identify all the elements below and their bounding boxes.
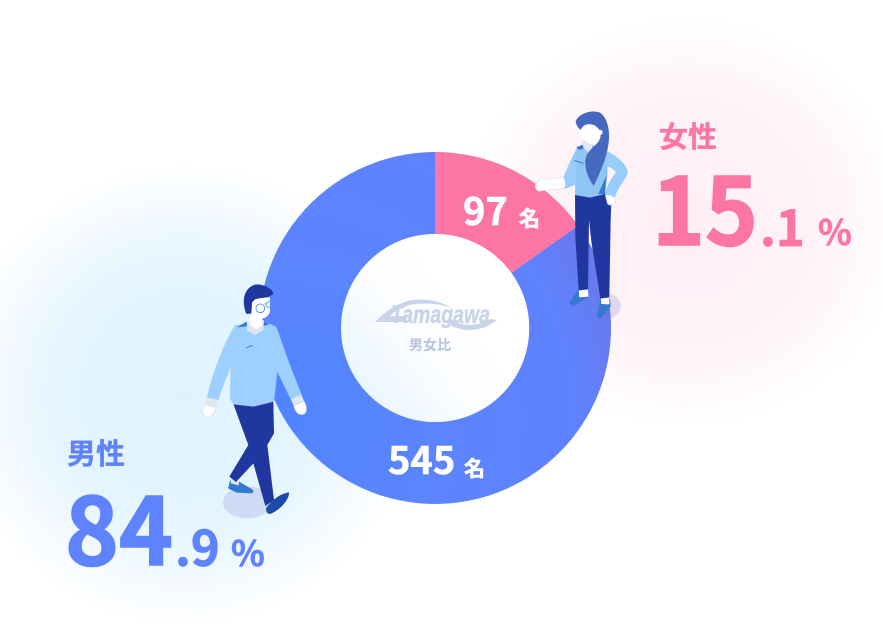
heading and percentage: female: % — [818, 205, 852, 256]
heading and percentage: female: 15 — [652, 137, 758, 272]
value: 97 名: 97 — [463, 181, 508, 236]
heading and percentage: female — [652, 114, 852, 272]
value: 97 名: 名 — [519, 203, 540, 233]
heading and percentage: male — [65, 431, 265, 592]
value: 545 名: 名 — [464, 453, 485, 483]
illustration: woman — [535, 111, 628, 319]
heading and percentage: male: .9 — [175, 510, 220, 581]
centre logo — [375, 299, 497, 355]
value: 545 名: 545 — [388, 430, 455, 485]
heading and percentage: female: 女性 — [659, 114, 717, 156]
heading and percentage: male: 84 — [65, 457, 173, 592]
donut centre — [341, 234, 529, 422]
logo caption: 男女比 — [409, 335, 451, 355]
heading and percentage: female: .1 — [760, 190, 805, 261]
donut chart — [259, 152, 611, 504]
blue background glow — [0, 163, 417, 627]
segment: male 84.9% — [259, 152, 611, 504]
segment: female 15.1% — [435, 152, 578, 273]
value: 545 名 — [388, 430, 485, 485]
pink background glow — [463, 17, 883, 427]
illustration: man — [203, 284, 306, 518]
heading and percentage: male: 男性 — [67, 431, 125, 473]
heading and percentage: male: % — [231, 526, 265, 577]
centre logo: Tamagawa — [391, 301, 490, 329]
value: 97 名 — [463, 181, 540, 236]
